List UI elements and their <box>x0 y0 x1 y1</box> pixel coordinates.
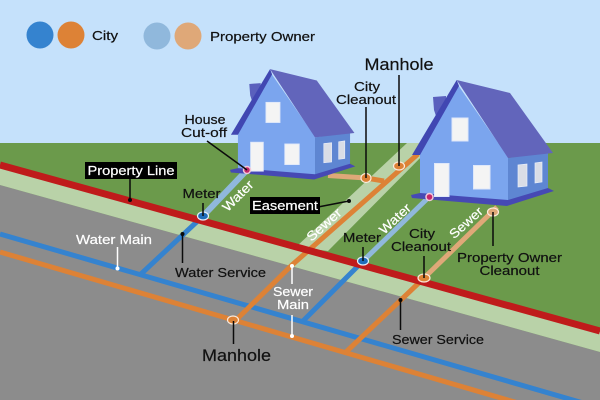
legend swatch: city sewer <box>58 22 84 48</box>
legend swatch: city water <box>26 22 54 48</box>
label: house cut-off <box>181 112 247 170</box>
label: city cleanout top: City <box>354 79 381 94</box>
label: water main: Water Main <box>76 232 152 247</box>
label: water left: Water <box>219 177 257 215</box>
label: meter right <box>343 230 382 261</box>
city sewer branch <box>366 178 384 181</box>
label: meter left <box>182 186 221 216</box>
marker: meter left <box>198 212 208 220</box>
label: easement <box>250 197 351 214</box>
marker: city cleanout right <box>418 274 430 282</box>
label: easement: Easement <box>252 198 318 213</box>
label: water service: Water Service <box>175 265 266 280</box>
label: manhole bottom: Manhole <box>202 346 271 365</box>
label: sewer service <box>392 298 484 347</box>
background: lawn <box>0 143 600 400</box>
owner water right <box>363 197 429 261</box>
label: property line <box>85 162 177 202</box>
sewer service to manhole left <box>235 154 418 321</box>
label: city cleanout top: Cleanout <box>336 92 396 107</box>
background: sky <box>0 0 600 144</box>
label: house cut-off: House <box>184 112 226 127</box>
label: sewer main: Main <box>277 297 309 312</box>
label: meter right: Meter <box>343 230 382 245</box>
label: water main <box>76 232 152 270</box>
legend label: property owner: Property Owner <box>210 29 316 44</box>
label: city cleanout right: Cleanout <box>391 239 451 254</box>
marker: manhole bottom <box>228 316 238 324</box>
marker: house cut-off left <box>244 166 250 174</box>
label: property line: Property Line <box>88 163 174 178</box>
label: sewer left: Sewer <box>303 205 345 244</box>
property line <box>0 165 600 331</box>
label: city cleanout top <box>336 79 396 178</box>
water main <box>0 234 590 400</box>
label: water right: Water <box>376 200 414 237</box>
house left <box>230 69 355 179</box>
legend swatch: owner sewer <box>174 22 202 50</box>
panel: street <box>0 185 600 400</box>
legend label: city: City <box>92 28 119 43</box>
label: sewer main <box>273 264 314 338</box>
easement strip to manhole <box>296 143 435 251</box>
label: property owner cleanout <box>457 212 563 278</box>
label: water service <box>175 232 266 280</box>
marker: city cleanout top <box>361 174 371 182</box>
legend swatch: owner water <box>144 22 170 50</box>
marker: manhole top <box>394 162 404 170</box>
label: city cleanout right <box>391 226 451 278</box>
label: manhole top: Manhole <box>364 55 434 74</box>
label: property owner cleanout: Cleanout <box>480 263 540 278</box>
owner sewer right <box>424 207 497 278</box>
marker: meter right <box>358 257 368 265</box>
label: manhole top <box>364 55 434 166</box>
label: sewer service: Sewer Service <box>392 332 484 347</box>
sewer service right <box>346 278 424 352</box>
water service right <box>303 261 363 321</box>
label: sewer right: Sewer <box>446 203 486 242</box>
label: house cut-off: Cut-off <box>181 125 227 140</box>
easement strip along street <box>0 166 600 352</box>
legend <box>26 22 316 50</box>
water service left <box>141 216 203 274</box>
house right <box>411 80 554 206</box>
label: city cleanout right: City <box>409 226 436 241</box>
owner sewer branch left <box>328 176 366 178</box>
label: meter left: Meter <box>182 186 221 201</box>
label: manhole bottom <box>202 321 271 365</box>
label: sewer main: Sewer <box>273 284 314 299</box>
marker: property owner cleanout <box>488 208 498 216</box>
label: property owner cleanout: Property Owner <box>457 250 563 265</box>
marker: house cut-off right <box>426 194 433 200</box>
sewer main <box>0 252 525 400</box>
owner water left <box>203 170 247 216</box>
